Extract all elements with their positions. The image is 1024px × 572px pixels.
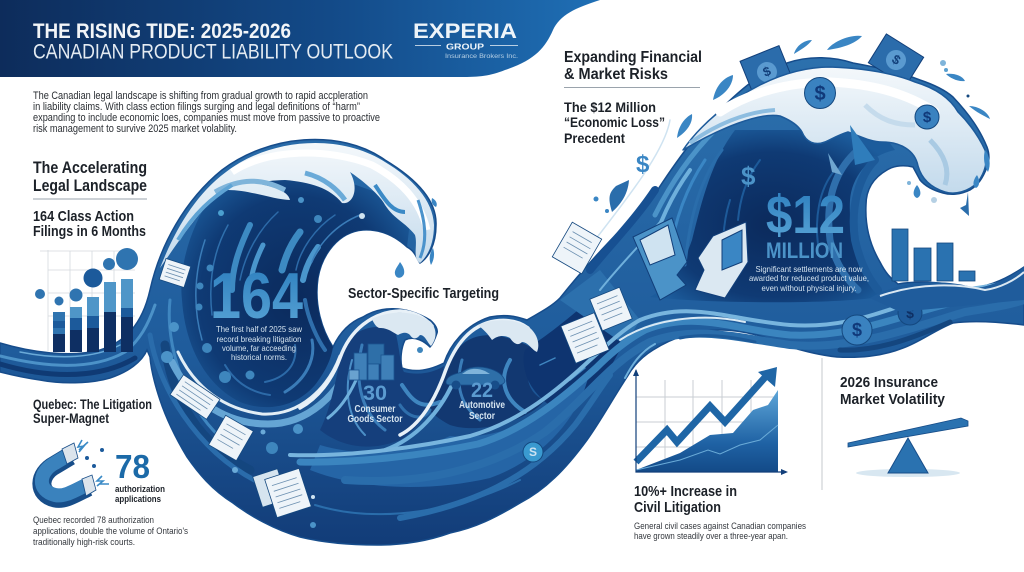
right wave foam — [683, 67, 986, 193]
swirl streaks — [196, 212, 360, 395]
right wave interior — [650, 130, 895, 302]
sector figures: 30 — [363, 382, 387, 405]
$12 million figure — [741, 161, 869, 293]
section: Quebec: Quebec recorded 78 authorization — [33, 515, 154, 526]
section: Quebec: authorization — [115, 484, 165, 495]
documents floating — [159, 222, 632, 518]
section: financial risks: & Market Risks — [564, 66, 668, 83]
bar chart: class action filings — [35, 248, 138, 352]
torn document — [633, 218, 748, 300]
section: accelerating legal landscape: Filings in 6 Months — [33, 223, 146, 240]
foam crest: 164 wave — [160, 143, 434, 268]
logo: Experia Group: GROUP — [446, 42, 484, 52]
logo: Experia Group: EXPERIA — [413, 20, 517, 43]
sector figures: 22 — [471, 379, 493, 402]
icon: magnet — [42, 440, 109, 498]
money: coins: $ — [852, 320, 862, 340]
area chart: civil litigation — [633, 367, 788, 475]
title: CANADIAN PRODUCT LIABILITY OUTLOOK — [33, 40, 393, 64]
164 figure: 164 — [210, 259, 303, 332]
164 figure: volume, far acceeding — [222, 343, 296, 353]
$12 million figure: Significant settlements are now — [756, 264, 863, 274]
right wave streaks — [590, 120, 878, 290]
small wave ridges and foam — [300, 311, 538, 450]
header banner — [0, 0, 600, 77]
$12 million figure: $ — [741, 161, 756, 191]
sector figures: Sector — [469, 411, 495, 422]
section: Quebec: Quebec: The Litigation — [33, 396, 152, 412]
icon: car — [446, 367, 505, 390]
drips and bubbles — [161, 197, 485, 528]
sector heading: Sector-Specific Targeting — [348, 285, 499, 302]
section: civil litigation text: General civil cases against Canadian companies — [634, 521, 806, 532]
swirl ring shading — [150, 300, 349, 482]
section: accelerating legal landscape: 164 Class Action — [33, 208, 134, 225]
intro paragraph: risk management to survive 2025 market volablity. — [33, 123, 237, 135]
section: insurance volatility heading — [840, 374, 946, 408]
small wave interiors — [310, 270, 640, 487]
$12 million figure: $12 — [766, 185, 845, 245]
164 figure: historical norms. — [231, 352, 287, 362]
section: insurance volatility heading: 2026 Insurance — [840, 374, 938, 391]
money: coins: $ — [923, 109, 932, 126]
$12 million figure: awarded for reduced product value, — [749, 273, 869, 283]
section: accelerating legal landscape: The Accelerating — [33, 158, 147, 177]
sector figures — [348, 379, 505, 425]
sector figures: Consumer — [354, 404, 396, 415]
$12 million figure: MILLION — [766, 238, 843, 263]
section: accelerating legal landscape: Legal Landscape — [33, 176, 147, 195]
money: coins — [523, 78, 939, 462]
intro paragraph: expanding to include economic loes, companies must move from passive to proactive — [33, 112, 380, 124]
sector figures: Goods Sector — [348, 414, 403, 425]
section: civil litigation text: Civil Litigation — [634, 499, 721, 516]
icon: seesaw — [848, 418, 968, 477]
money: bills behind foam — [740, 34, 924, 98]
section: insurance volatility heading: Market Volatility — [840, 391, 946, 408]
dollar icon: $ — [636, 151, 650, 178]
section: Quebec — [33, 396, 188, 548]
icon: consumer products — [349, 344, 394, 380]
164 figure: The first half of 2025 saw — [216, 324, 303, 334]
falling bar chart — [892, 229, 975, 281]
section: Quebec: applications, double the volume of Ontario's — [33, 526, 188, 537]
logo: Experia Group — [413, 20, 518, 60]
section: financial risks — [564, 49, 702, 146]
money: coins: $ — [814, 83, 826, 105]
band highlights — [880, 272, 1024, 296]
droplets and arrows near right crest — [594, 36, 990, 216]
intro paragraph: in liability claims. With class ection filings surging and legal definitions of “harm” — [33, 101, 360, 113]
swirl interior — [181, 165, 412, 407]
section: accelerating legal landscape — [33, 158, 147, 240]
section: Quebec: traditionally high-risk courts. — [33, 537, 135, 548]
section: civil litigation text — [634, 483, 806, 542]
$12 million figure: even without physical injury. — [762, 283, 856, 293]
sector figures: Automotive — [459, 400, 505, 411]
logo: Experia Group: Insurance Brokers Inc. — [445, 54, 518, 60]
money: bills behind foam: $ — [889, 51, 904, 68]
section: Quebec: 78 — [115, 448, 150, 485]
left ribbon shading — [0, 305, 155, 374]
intro paragraph: The Canadian legal landscape is shifting from gradual growth to rapid accpleration — [33, 90, 368, 102]
section: financial risks: Precedent — [564, 130, 625, 146]
section: Quebec: applications — [115, 494, 161, 505]
re-cover band over bars — [870, 267, 1024, 312]
section: civil litigation text: 10%+ Increase in — [634, 483, 737, 500]
lower sweep ribbons — [290, 222, 1024, 518]
title — [33, 20, 393, 64]
intro paragraph — [33, 90, 380, 135]
section: Quebec: Super-Magnet — [33, 410, 109, 426]
money: bills behind foam: $ — [761, 63, 774, 80]
section: financial risks: “Economic Loss” — [564, 114, 665, 130]
section: financial risks: Expanding Financial — [564, 49, 702, 66]
money: coins: $ — [906, 305, 914, 321]
section: financial risks: The $12 Million — [564, 99, 656, 115]
164 figure — [210, 259, 303, 362]
money: coins: S — [529, 445, 537, 459]
section: civil litigation text: have grown steadily over a three-year apan. — [634, 531, 788, 542]
164 figure: record breaking litigation — [216, 334, 302, 344]
title: THE RISING TIDE: 2025-2026 — [33, 20, 291, 43]
